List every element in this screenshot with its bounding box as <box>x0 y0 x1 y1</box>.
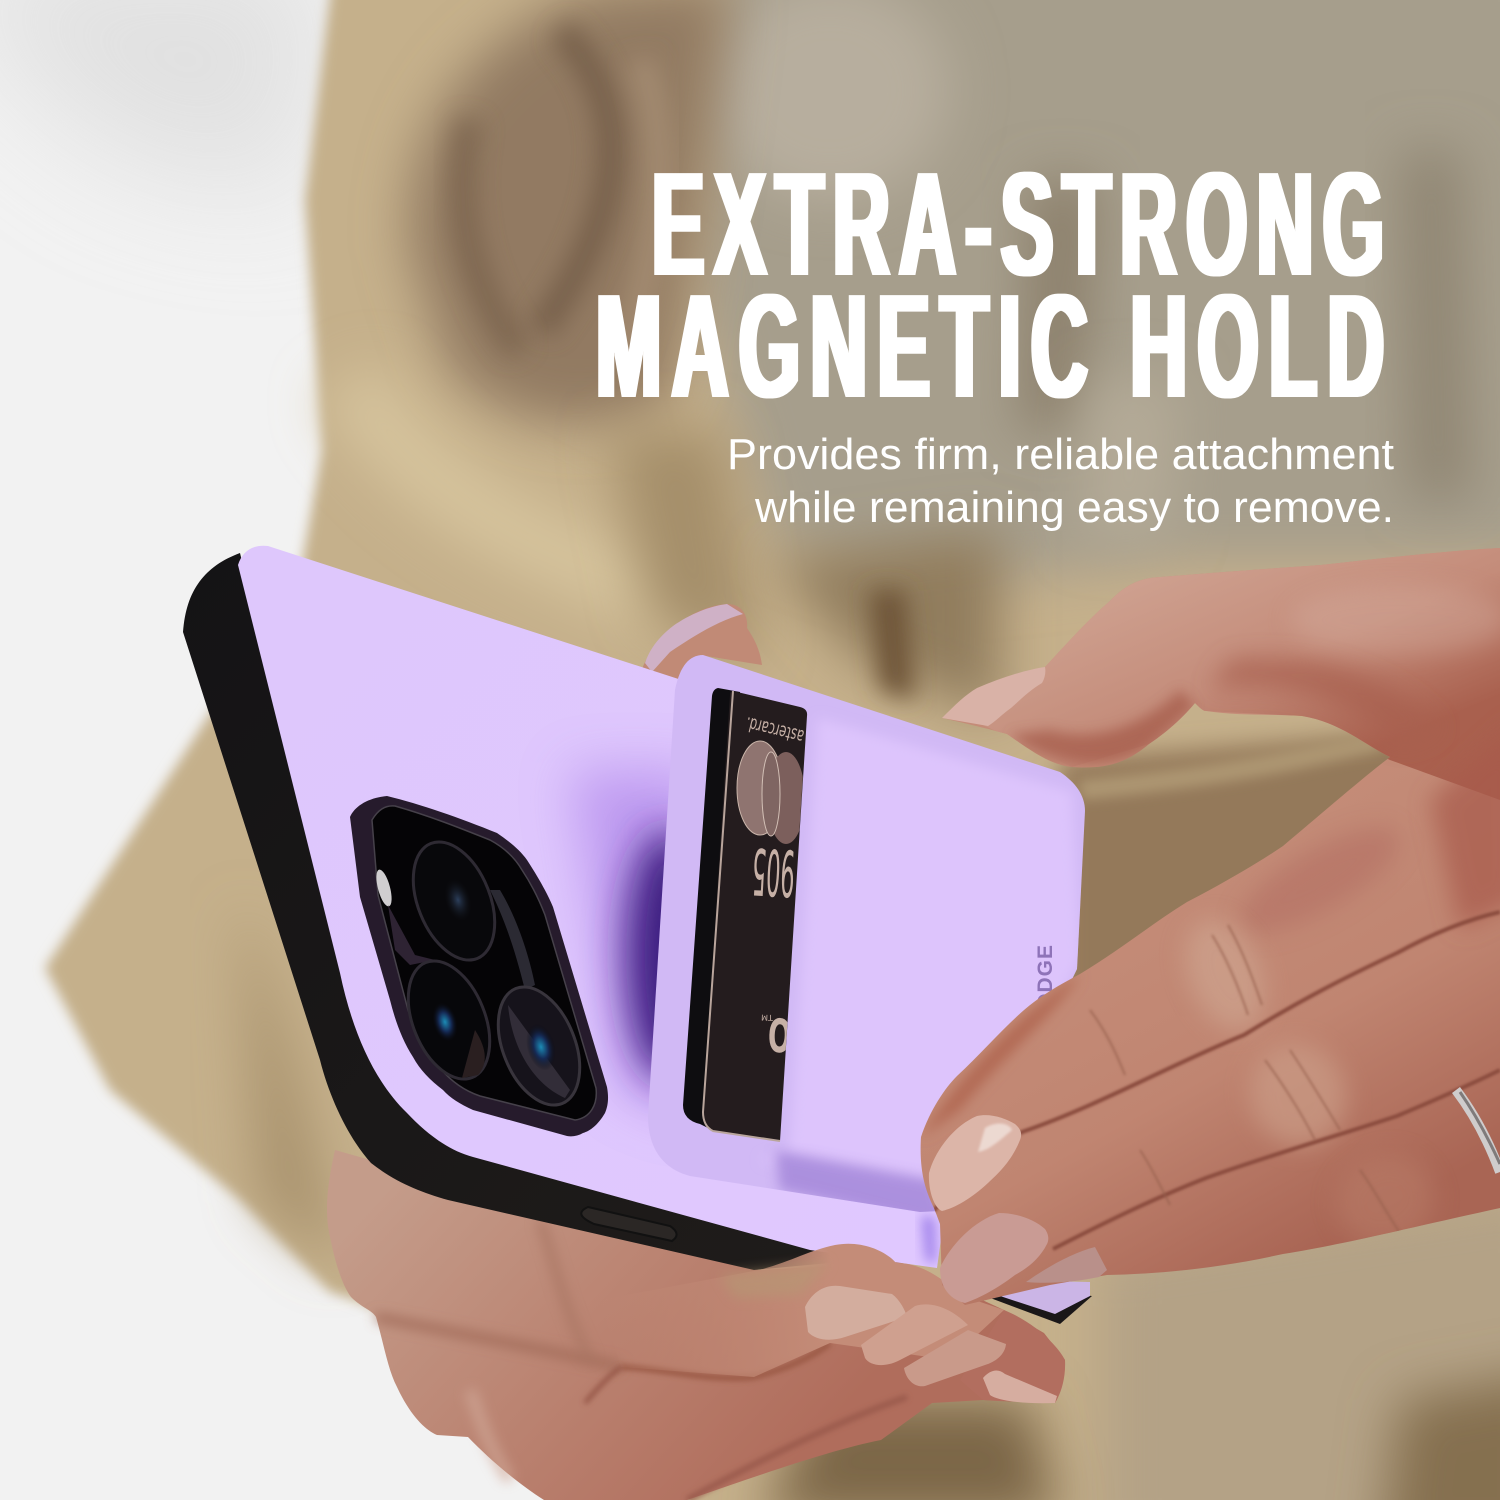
lower phone corner <box>985 1280 1092 1324</box>
knuckle three <box>1322 1140 1448 1260</box>
finger crease: middle and ring <box>1053 1070 1500 1249</box>
grey reflection strip <box>490 890 535 990</box>
index finger redness <box>1244 828 1396 932</box>
wallet cast shadow <box>570 770 936 1264</box>
left hand palm and fingers <box>327 1150 1065 1500</box>
card text <box>748 717 804 1053</box>
lower left lens <box>392 949 506 1091</box>
wallet upper face <box>792 725 1082 1175</box>
title line 2: MAGNETIC HOLD <box>596 265 1384 429</box>
ring <box>1456 1090 1500 1172</box>
camera flash <box>373 868 395 908</box>
subtitle line 1: Provides firm, reliable attachment <box>727 430 1394 479</box>
card brand text: astercard. <box>743 712 806 749</box>
phone case <box>183 546 1092 1324</box>
back of hand redness <box>1425 779 1500 930</box>
lavender case back <box>238 546 960 1268</box>
sliding wallet <box>648 655 1085 1230</box>
left fingernails <box>805 1286 1057 1403</box>
title <box>596 143 1384 429</box>
finger behind the phone <box>640 604 762 690</box>
card logo O: O <box>767 1007 792 1061</box>
title line 1: EXTRA-STRONG <box>652 143 1384 307</box>
fingernail behind the phone <box>645 604 743 672</box>
subtitle <box>727 430 1394 532</box>
subtitle line 2: while remaining easy to remove. <box>754 483 1394 532</box>
thumb nail <box>942 667 1045 726</box>
charging port <box>581 1207 677 1241</box>
camera module <box>350 796 608 1136</box>
card slot <box>683 688 740 1130</box>
hand silhouette <box>921 548 1500 1305</box>
thumb underside shadow <box>1010 690 1195 763</box>
right lens <box>482 975 596 1117</box>
web of thumb shadow <box>1212 649 1396 714</box>
index nail <box>929 1115 1021 1211</box>
wallet lower shaded edge <box>770 1146 935 1212</box>
thumb base shading <box>720 1262 830 1298</box>
finger crease: index and middle <box>930 912 1500 1215</box>
back of hand highlight <box>1290 585 1500 655</box>
ring finger nail <box>1026 1247 1107 1283</box>
black bumper <box>183 553 840 1270</box>
card logo circles <box>737 741 805 844</box>
brand mark on wallet: ODGE <box>1034 944 1057 1010</box>
knuckle one <box>1185 920 1266 1032</box>
upper lens <box>397 830 511 972</box>
trademark: TM <box>761 1013 774 1022</box>
knuckle wrinkles <box>1090 925 1405 1240</box>
card digits: 905 <box>750 833 797 908</box>
left thumb <box>600 1244 1057 1403</box>
index finger edge shadow <box>924 978 1076 1131</box>
right hand <box>921 530 1500 1305</box>
thumb and palm shading <box>985 553 1500 800</box>
knuckle two <box>1248 1044 1350 1151</box>
metal card <box>703 691 807 1141</box>
middle nail <box>940 1213 1048 1303</box>
camera inner bracket <box>388 905 435 965</box>
